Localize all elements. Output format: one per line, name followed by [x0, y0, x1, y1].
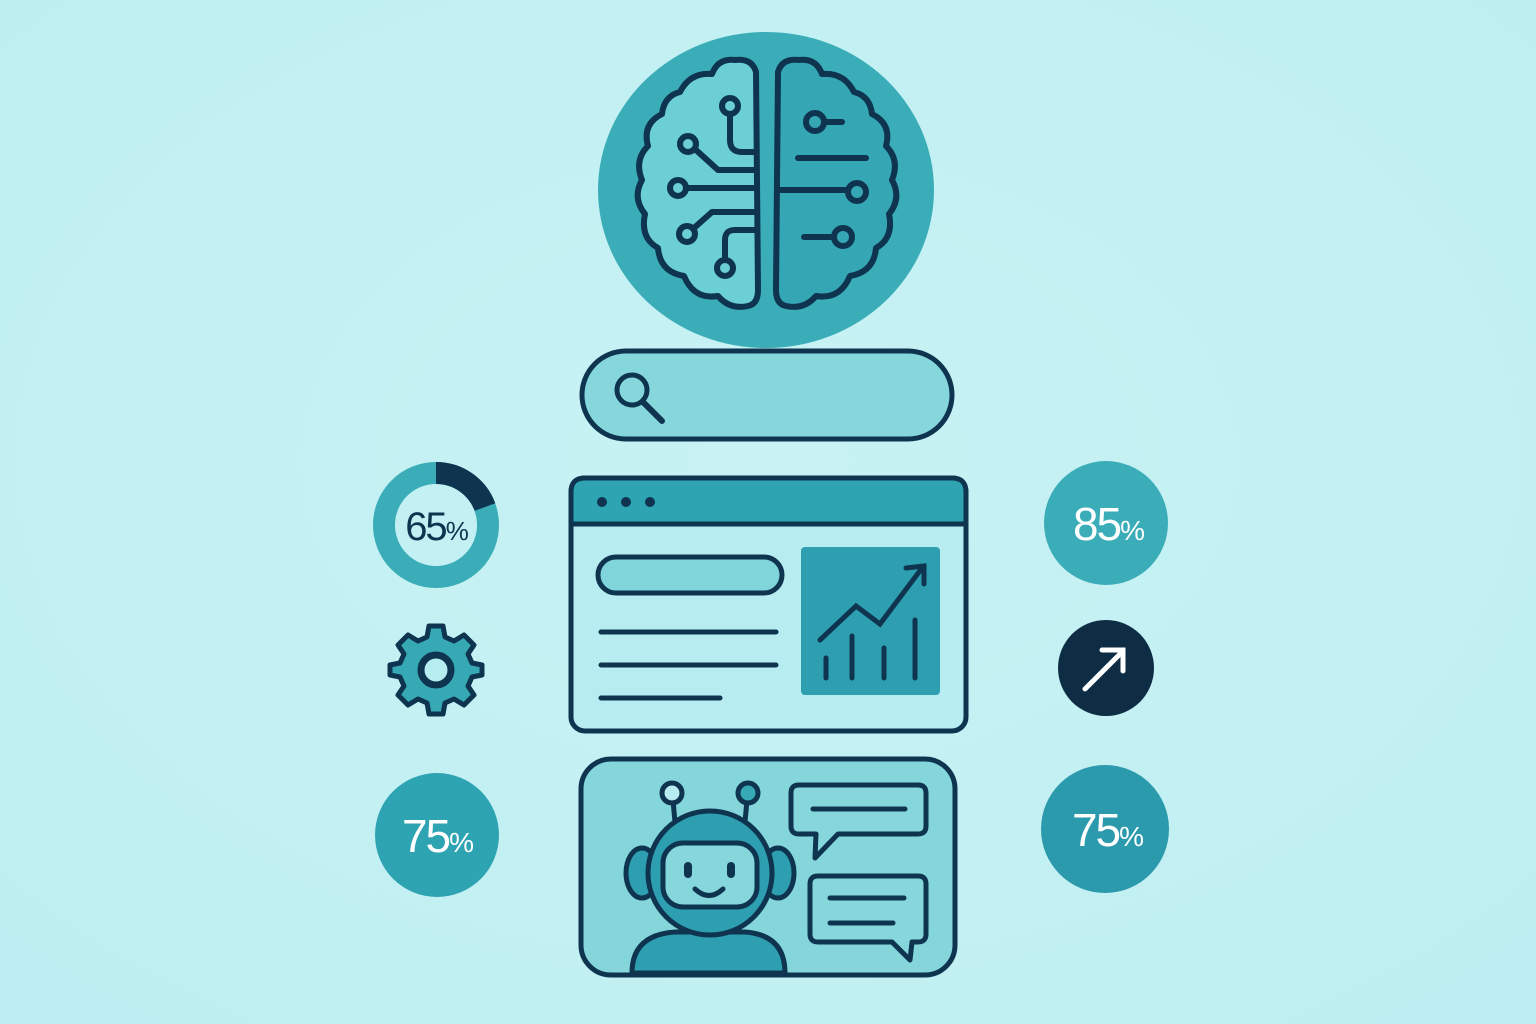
stat circle 75% left — [375, 773, 499, 897]
stat circle 85%: 85% — [1073, 498, 1144, 550]
stat donut 65% — [384, 473, 488, 577]
browser window dashboard — [571, 478, 966, 731]
chatbot panel — [581, 759, 955, 975]
search bar — [582, 351, 952, 439]
stat circle 85% — [1044, 461, 1168, 585]
stat circle 75% right: 75% — [1072, 804, 1143, 856]
stat circle 75% right — [1041, 765, 1169, 893]
icon: gear — [390, 626, 482, 714]
chart — [801, 547, 940, 695]
icon: growth arrow — [1058, 620, 1154, 716]
stat circle 75% left: 75% — [402, 810, 473, 862]
brain icon — [598, 32, 934, 348]
stat donut 65%: 65% — [405, 505, 469, 549]
speech bubbles — [791, 785, 926, 960]
